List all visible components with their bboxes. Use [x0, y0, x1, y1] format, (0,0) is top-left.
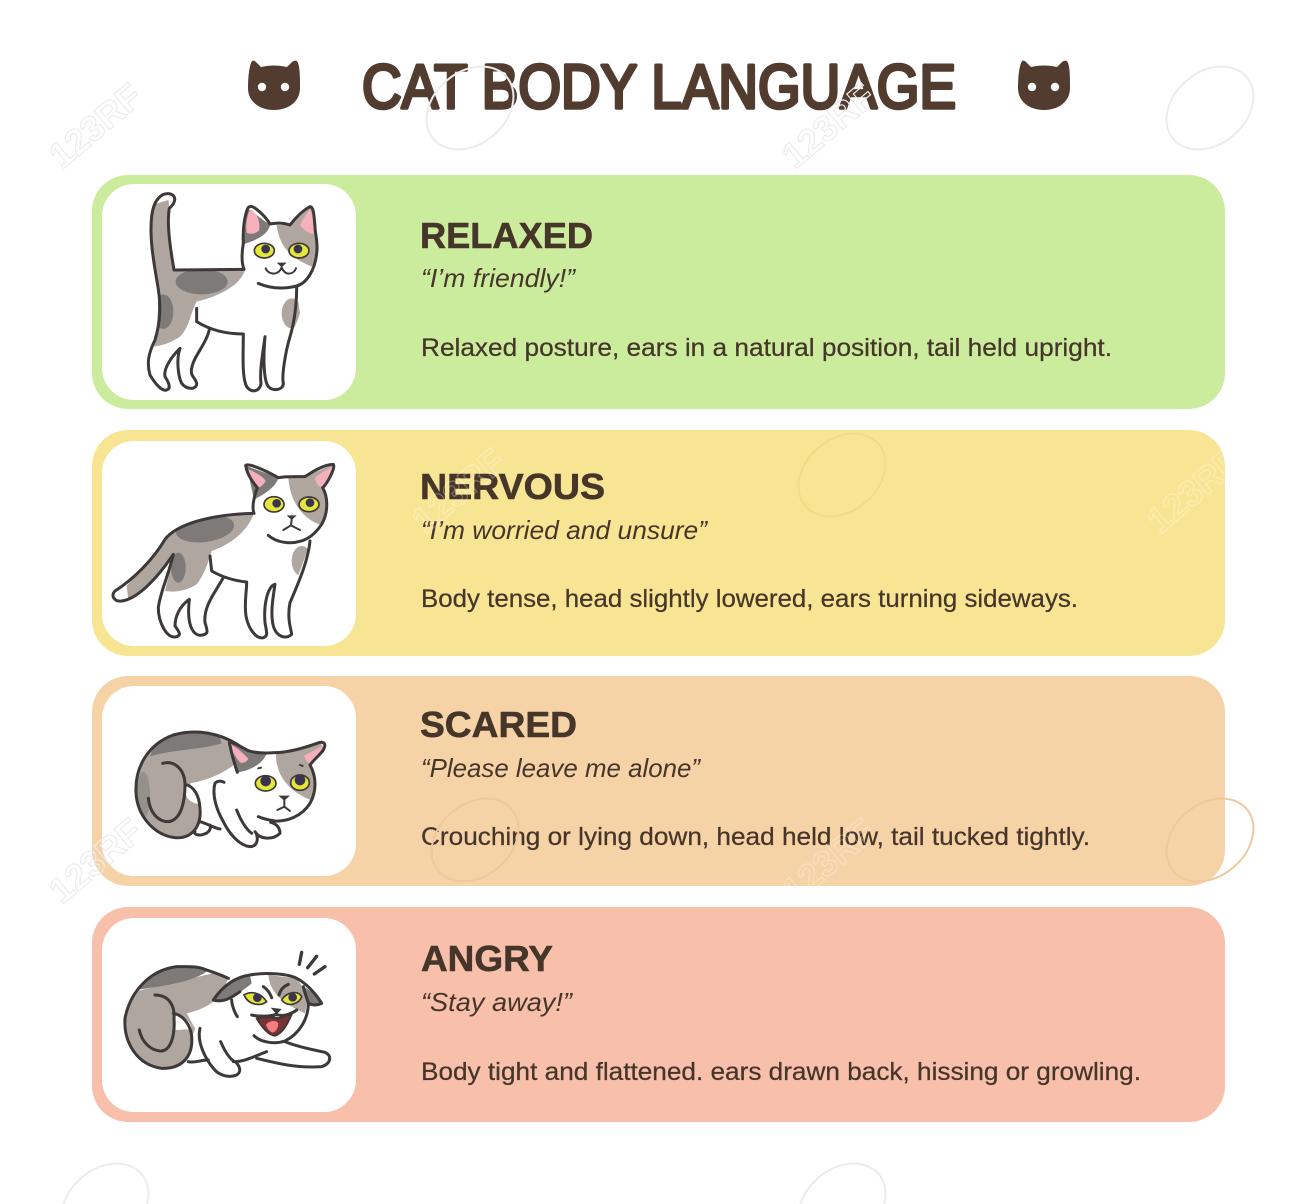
illustration: nervous cat — [113, 464, 334, 638]
heading: ANGRY — [421, 938, 553, 979]
quote: “I’m worried and unsure” — [421, 515, 708, 545]
text: 123RF — [404, 440, 513, 541]
panel: scared — [92, 676, 1225, 886]
heading: SCARED — [420, 704, 577, 745]
icon: cat head right — [1018, 61, 1070, 110]
quote: “I’m friendly!” — [421, 263, 576, 293]
card background — [92, 907, 1225, 1122]
illustration: relaxed cat — [147, 194, 317, 391]
illustration: angry cat — [120, 952, 330, 1076]
image tile — [102, 184, 356, 400]
heading: RELAXED — [420, 215, 593, 256]
description: Body tight and flattened. ears drawn back, hissing or growling. — [421, 1058, 1141, 1086]
card background — [92, 676, 1225, 886]
panel: nervous — [92, 430, 1225, 656]
description: Body tense, head slightly lowered, ears turning sideways. — [421, 585, 1078, 613]
panel: angry — [92, 907, 1225, 1122]
image tile — [102, 918, 356, 1112]
card background — [92, 175, 1225, 409]
image tile — [102, 686, 356, 876]
heading: NERVOUS — [420, 466, 605, 507]
description: Crouching or lying down, head held low, tail tucked tightly. — [421, 823, 1090, 851]
heading text: CAT BODY LANGUAGE — [362, 53, 956, 122]
text: 123RF — [774, 75, 883, 176]
text: 123RF — [1139, 440, 1248, 541]
image tile — [102, 441, 356, 646]
text: 123RF — [774, 810, 883, 911]
description: Relaxed posture, ears in a natural position, tail held upright. — [421, 334, 1112, 362]
panel: relaxed — [92, 175, 1225, 409]
quote: “Please leave me alone” — [421, 753, 701, 783]
icon: cat head left — [248, 61, 300, 110]
illustration: scared cat — [133, 728, 325, 847]
title — [248, 53, 1070, 122]
text: 123RF — [41, 75, 150, 176]
text: 123RF — [41, 810, 150, 911]
card background — [92, 430, 1225, 656]
quote: “Stay away!” — [421, 987, 573, 1017]
